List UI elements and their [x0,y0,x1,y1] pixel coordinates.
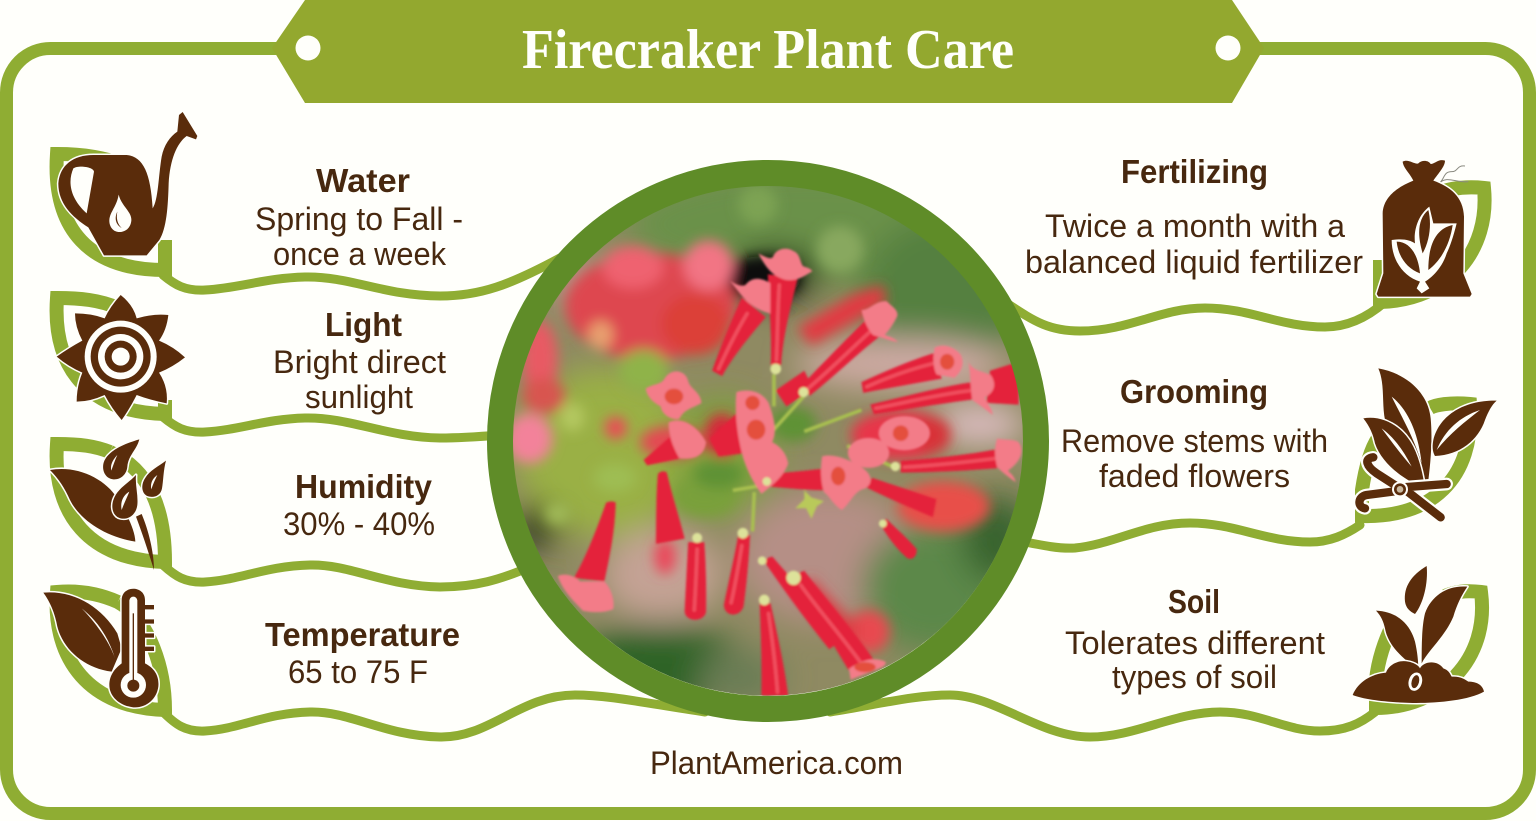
stems [733,374,894,531]
text: fertilizing: balanced liquid fertilizer [1025,244,1363,280]
text: soil: types of soil [1112,659,1277,695]
shears [1359,457,1447,517]
panel: water [57,112,463,272]
text: fertilizing [1025,208,1363,280]
header banner [272,0,1264,103]
panel: grooming [1061,368,1497,517]
text: fertilizing: Twice a month with a [1045,208,1345,244]
heading: humidity: Humidity [295,468,433,505]
text: water: Spring to Fall - [255,201,463,237]
icon: watering can [58,112,197,255]
flower throats [665,354,954,672]
icon: fertilizer bag [1377,160,1472,297]
calyxes [692,364,900,605]
leaf outline: soil [1376,591,1482,708]
heading: light: Light [325,306,402,343]
leaf outline: water [57,154,165,270]
heading: temperature: Temperature [265,616,460,653]
panel: light [57,295,446,420]
leaf outline: light [57,298,165,414]
text: humidity: 30% - 40% [283,506,435,542]
small green bract [795,490,824,519]
heading: grooming: Grooming [1120,373,1268,410]
title: Firecraker Plant Care [522,19,1014,81]
text: water: once a week [273,236,447,272]
leaf outline: grooming [1362,403,1470,516]
text: light: Bright direct [273,344,446,380]
heading: water: Water [316,162,410,199]
flower heads [558,249,1022,680]
panel: soil [1065,566,1484,708]
circular photo of firecracker plant [500,164,1036,710]
tube highlights [694,285,997,692]
photo: red tubular flowers [506,164,1033,710]
leaf outline: humidity [57,444,165,562]
text: grooming: faded flowers [1099,458,1290,494]
text: water [255,201,463,272]
panel: temperature [43,589,460,710]
icon: leaves and shears [1359,368,1497,517]
text: grooming: Remove stems with [1061,423,1328,459]
text: soil: Tolerates different [1065,625,1325,661]
text: light [273,344,446,415]
panel: humidity [50,439,435,570]
panel: fertilizing [1025,153,1485,302]
heading: soil: Soil [1168,583,1220,620]
website credit: PlantAmerica.com [650,745,903,781]
wavy connectors [163,258,1385,737]
tubes [574,274,1019,696]
leaf outline: temperature [57,591,165,710]
icon: thermometer and leaf [43,589,158,707]
photo ring [500,173,1036,709]
icon: sprout in soil [1353,566,1484,703]
text: temperature: 65 to 75 F [288,654,428,690]
leaf outline: fertilizing [1380,187,1485,302]
icon: sun [57,295,185,420]
text: soil [1065,625,1325,695]
text: light: sunlight [305,379,413,415]
text: grooming [1061,423,1328,494]
icon: leaf with drops [50,439,166,570]
heading: fertilizing: Fertilizing [1121,153,1268,190]
